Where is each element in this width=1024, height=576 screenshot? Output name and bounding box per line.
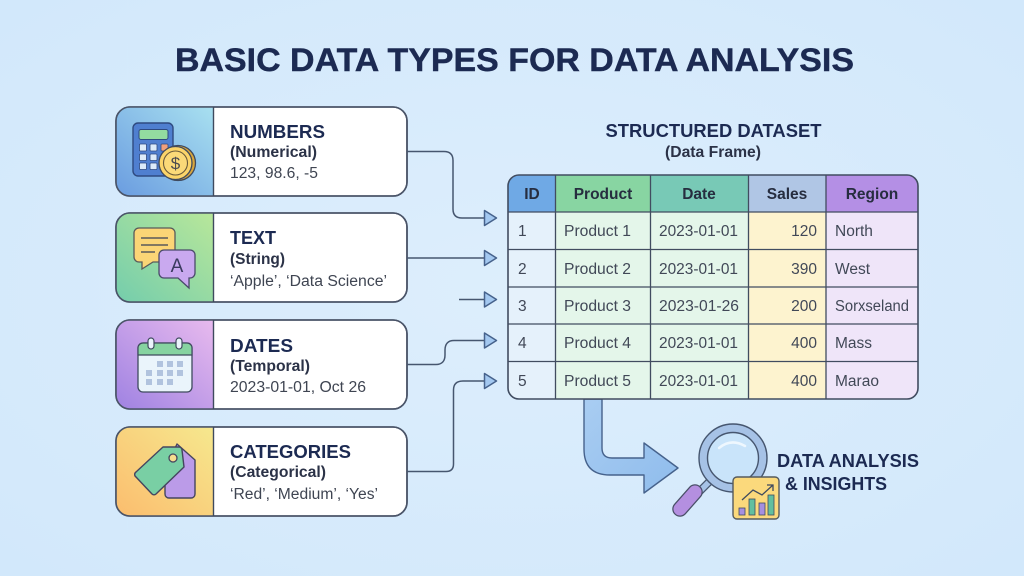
table row 1: 1 — [518, 223, 527, 240]
panel: numbers — [116, 107, 407, 196]
table row 2: 390 — [791, 261, 817, 278]
table row 5: 5 — [518, 373, 527, 390]
examples: dates: 2023-01-01, Oct 26 — [230, 379, 366, 396]
subheading: data frame: (Data Frame) — [665, 144, 761, 161]
title: BASIC DATA TYPES FOR DATA ANALYSIS — [175, 42, 854, 78]
subheading: string: (String) — [230, 251, 285, 268]
table row 5: 2023-01-01 — [659, 373, 738, 390]
examples: text: ‘Apple’, ‘Data Science’ — [230, 273, 387, 290]
icon: tags — [135, 444, 195, 498]
table row 3 — [518, 298, 909, 315]
table: structured dataset — [508, 175, 918, 399]
table header row: ID — [524, 186, 540, 203]
arrow: categories to table — [407, 374, 496, 472]
table header row: Region — [846, 186, 898, 203]
table header row: Sales — [767, 186, 807, 203]
panel: dates — [116, 320, 407, 409]
table row 2: 2 — [518, 261, 527, 278]
icon: calendar — [138, 338, 192, 392]
arrow: dates to table — [407, 333, 496, 364]
heading: structured dataset: STRUCTURED DATASET — [606, 121, 822, 141]
examples: categories: ‘Red’, ‘Medium’, ‘Yes’ — [230, 486, 378, 503]
table row 4: Mass — [835, 335, 872, 352]
panel: categories — [116, 427, 407, 516]
table row 3: Product 3 — [564, 298, 631, 315]
table row 4: 400 — [791, 335, 817, 352]
table row 4: 2023-01-01 — [659, 335, 738, 352]
heading: numbers: NUMBERS — [230, 122, 325, 142]
heading: dates: DATES — [230, 336, 293, 356]
label: data analysis and insights: DATA ANALYSIS — [777, 451, 919, 471]
table row 1: 2023-01-01 — [659, 223, 738, 240]
table row 1: 120 — [791, 223, 817, 240]
arrow: short to table — [459, 292, 496, 307]
table row 3: 2023-01-26 — [659, 298, 739, 315]
label: data analysis and insights: & INSIGHTS — [785, 474, 887, 494]
subheading: temporal: (Temporal) — [230, 358, 310, 375]
table row 4 — [518, 335, 872, 352]
table row 5 — [518, 373, 879, 390]
table row 2: Product 2 — [564, 261, 631, 278]
table row 3: 200 — [791, 298, 817, 315]
table row 4: Product 4 — [564, 335, 631, 352]
icon: speech bubbles: A — [171, 256, 184, 277]
table row 2: West — [835, 261, 871, 278]
icon: magnifying glass with chart — [680, 424, 779, 519]
table row 1: North — [835, 223, 873, 240]
table header row — [524, 186, 898, 203]
subheading: numerical: (Numerical) — [230, 144, 317, 161]
table header row: Product — [574, 186, 632, 203]
table row 3: 3 — [518, 298, 527, 315]
table row 4: 4 — [518, 335, 527, 352]
icon: speech bubbles — [134, 228, 195, 288]
table row 5: Marao — [835, 373, 879, 390]
arrow: text to table — [407, 250, 496, 266]
table header row: Date — [682, 186, 716, 203]
heading: categories: CATEGORIES — [230, 442, 351, 462]
table row 1 — [518, 223, 873, 240]
table row 3: Sorxseland — [835, 298, 909, 315]
examples: numbers: 123, 98.6, -5 — [230, 165, 318, 182]
subheading: categorical: (Categorical) — [230, 464, 326, 481]
table row 5: Product 5 — [564, 373, 631, 390]
arrow: numbers to table — [407, 152, 496, 226]
icon: calculator with coin — [133, 123, 196, 180]
panel: text — [116, 213, 407, 302]
table row 2 — [518, 261, 871, 278]
table row 5: 400 — [791, 373, 817, 390]
label: data analysis and insights — [777, 451, 919, 494]
big arrow: table to analysis — [584, 399, 678, 493]
table row 1: Product 1 — [564, 223, 631, 240]
table row 2: 2023-01-01 — [659, 261, 738, 278]
heading: text: TEXT — [230, 228, 276, 248]
icon: calculator with coin: $ — [171, 154, 181, 173]
